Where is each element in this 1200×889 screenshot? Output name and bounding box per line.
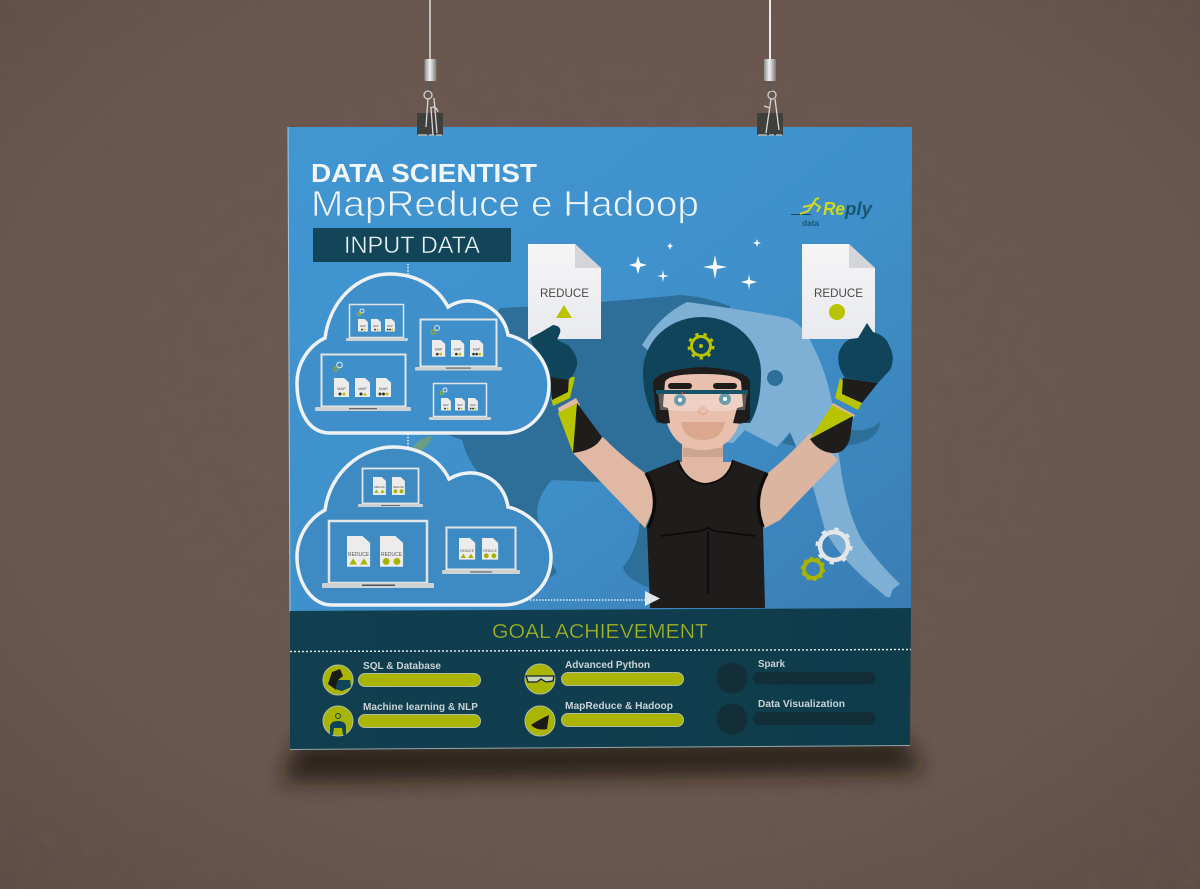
input data heading [313,228,511,262]
skill: data visualization (not achieved): Data Visualization [758,699,845,710]
skill: sql and database [323,661,480,695]
title: data scientist: DATA SCIENTIST [311,158,537,188]
hanging clip left [417,0,443,135]
skill: mapreduce and hadoop: MapReduce & Hadoop [565,701,673,712]
laptop map 2 [415,320,502,370]
elephant eye [767,370,783,386]
helmet ear guards [656,405,749,424]
laptop reduce 2: REDUCE [381,552,403,558]
laptop map 3: MAP [337,386,346,391]
shirt seams [646,460,767,594]
laptop map 3 [315,354,411,411]
laptop map 1: MAP [373,324,379,328]
gear: white [817,529,851,563]
laptop reduce 2 [322,521,434,588]
title: mapreduce e hadoop: MapReduce e Hadoop [311,183,699,224]
neck shadow [683,448,723,457]
skill: advanced python: Advanced Python [565,660,650,671]
laptop reduce 3: REDUCE [460,549,475,553]
document: reduce circle [802,244,875,339]
eyebrows [668,383,737,389]
skill: advanced python [525,660,684,694]
poster shadow [282,738,922,782]
laptop map 4: MAP [457,403,463,407]
helmet [643,317,761,423]
poster panel [288,127,912,612]
laptop reduce 3: REDUCE [483,549,498,553]
skill: spark (not achieved) [716,659,876,694]
stars [629,239,761,290]
left arm [573,437,657,528]
laptop map 1 [346,304,408,341]
logo: reply data [791,198,873,228]
laptop map 2: MAP [454,348,462,352]
right forearm [810,378,878,453]
right glove [838,323,893,383]
document: reduce triangle: REDUCE [540,286,589,300]
torso shirt [645,460,768,608]
cloud: reduce [297,447,551,605]
logo: reply data: Re [823,199,845,219]
laptop reduce 1: REDUCE [374,485,385,489]
laptop map 3: MAP [358,386,367,391]
left forearm [550,377,602,453]
arrow head [645,591,660,606]
document: reduce circle: REDUCE [814,286,863,300]
helmet gear [689,334,713,358]
elephant ear and trunk [642,302,900,597]
elephant rear leg [623,500,670,588]
nose [698,411,708,414]
document: reduce triangle [528,244,601,339]
laptop reduce 2: REDUCE [348,552,370,558]
dotted flow connectors [408,264,646,600]
elephant tail tuft [411,436,432,452]
character: data scientist [530,317,893,608]
skill: mapreduce and hadoop [525,701,684,736]
left glove [530,325,577,380]
logo: reply data: ply [844,199,873,219]
logo: reply data: data [802,219,820,228]
laptop map 1: MAP [387,324,393,328]
skill: spark (not achieved): Spark [758,659,785,670]
goal achievement panel [290,608,911,750]
smart glasses [656,390,748,411]
helmet inner lining [653,367,750,424]
mouth [681,422,725,440]
input data heading: INPUT DATA [344,232,480,259]
laptop map 4: MAP [470,403,476,407]
cloud outline reduce [297,447,551,605]
skill: machine learning and nlp [323,702,480,736]
skill: machine learning and nlp: Machine learning & NLP [363,702,478,713]
skill: sql and database: SQL & Database [363,661,441,672]
laptop map 4 [429,384,491,420]
goal achievement heading: GOAL ACHIEVEMENT [492,621,708,643]
laptop map 1: MAP [360,324,366,328]
elephant illustration [411,295,900,597]
laptop map 3: MAP [379,386,388,391]
hanging clip right [757,0,783,135]
laptop reduce 3 [442,528,520,574]
laptop map 4: MAP [443,403,449,407]
cloud outline map [297,274,549,433]
gear: yellow [802,558,824,580]
cloud: map [297,274,549,433]
laptop reduce 1 [358,468,423,507]
face [663,374,743,450]
elephant tusk [782,422,880,450]
laptop reduce 1: REDUCE [393,485,404,489]
neck [678,440,733,484]
laptop map 2: MAP [473,348,481,352]
laptop map 2: MAP [435,348,443,352]
right arm [752,433,838,528]
elephant body [440,295,730,580]
skill: data visualization (not achieved) [716,699,876,734]
